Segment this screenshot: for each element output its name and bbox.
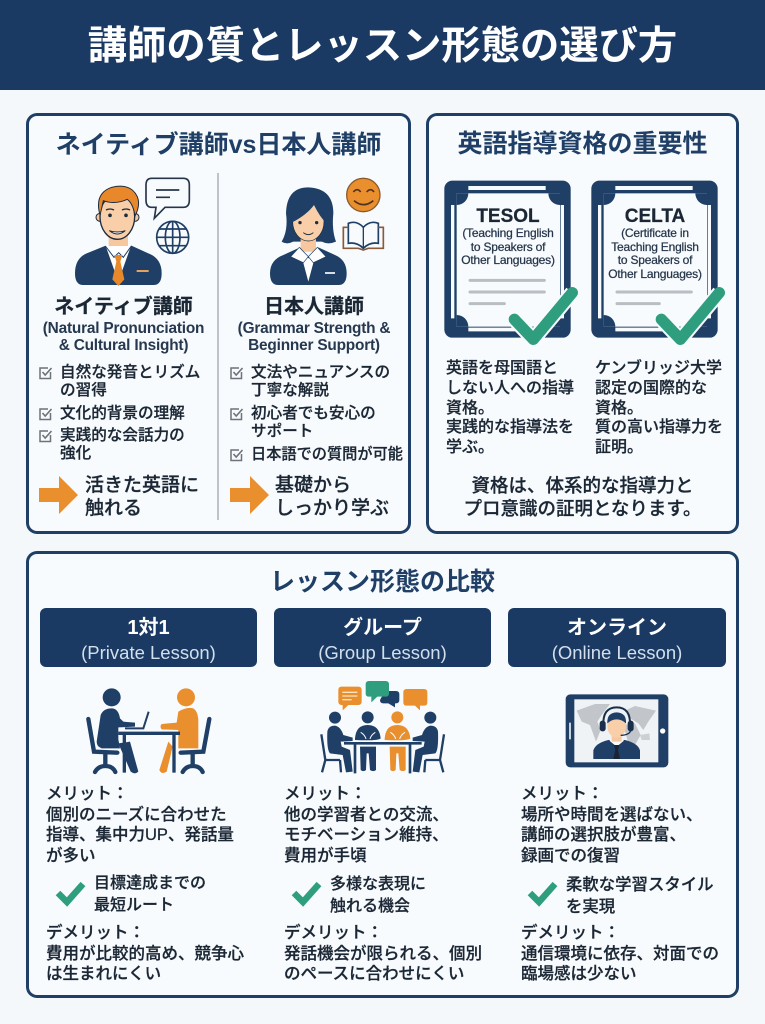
takeaway text: 活きた英語に [85,475,199,496]
certificate name: CELTA [625,206,685,227]
merit text: が多い [46,847,96,865]
panel heading: レッスン形態の比較 [270,568,495,596]
column: online lesson [508,608,726,988]
icon: Japanese teacher with smiley and book [270,178,384,285]
TESOL description: 学ぶ。 [446,439,494,456]
certificate name: TESOL [476,206,540,227]
takeaway text: 基礎から [275,475,351,496]
merit text [521,784,702,867]
merit text: 場所や時間を選ばない、 [521,806,702,824]
demerit text: 費用が比較的高め、競争心 [46,945,244,963]
certificate description: to Speakers of [471,240,545,254]
panel: English teaching qualifications [426,113,739,534]
divider [217,173,219,520]
list item: 実践的な会話力の [60,427,185,444]
panel heading: ネイティブ講師vs日本人講師 [56,131,381,159]
merit text: 個別のニーズに合わせた [46,806,227,824]
demerit text: は生まれにくい [46,965,161,983]
TESOL description [446,359,574,456]
demerit text: 臨場感は少ない [521,965,636,983]
benefit text: 最短ルート [94,897,174,914]
list item [251,404,376,440]
teacher name: 日本人講師 [264,296,364,318]
demerit text: デメリット： [521,924,620,942]
certificate description: Other Languages) [461,253,555,267]
teacher name: ネイティブ講師 [54,296,193,318]
takeaway text: しっかり学ぶ [275,498,389,519]
list item: 文化的背景の理解 [60,405,185,422]
list item: の習得 [60,382,107,399]
teacher subtitle: (Natural Pronunciation [43,320,204,337]
icon: check mark [527,880,558,906]
teacher subtitle [43,320,204,354]
benefit text: 多様な表現に [330,876,426,893]
column: native teacher [39,178,204,519]
qualification summary: プロ意識の証明となります。 [463,498,702,519]
certificate frame [591,180,725,345]
takeaway text [275,474,389,519]
icon: check mark [56,882,86,907]
list item: 日本語での質問が可能 [251,446,403,463]
icon: tablet with instructor and world map [510,680,740,780]
list item [251,364,390,399]
CELTA description: 認定の国際的な [595,380,707,397]
teacher subtitle [238,320,390,354]
list item: 文法やニュアンスの [251,364,390,381]
certificate description: Other Languages) [608,266,702,280]
demerit text: 通信環境に依存、対面での [521,945,719,963]
arrow [39,476,78,514]
takeaway text [85,474,199,519]
benefit text: 柔軟な学習スタイル [566,876,714,894]
demerit text [521,923,719,985]
CELTA description [595,358,723,456]
benefit text [330,875,426,915]
list item: 自然な発音とリズム [60,364,200,381]
benefit text: 目標達成までの [94,875,206,892]
title: 講師の質とレッスン形態の選び方 [88,24,677,68]
certificate description [608,226,702,281]
merit text [284,785,449,865]
icon: checkbox [39,367,52,380]
tab title: グループ [343,617,422,639]
TESOL description: 実践的な指導法を [446,419,574,436]
certificate: CELTA [591,180,725,345]
benefit text: を実現 [566,898,615,916]
TESOL description: 英語を母国語と [446,360,558,377]
benefit text [94,874,206,914]
merit text: 録画での復習 [521,847,620,865]
certificate description: Teaching English [611,240,699,254]
qualification summary [463,475,702,519]
tab subtitle: (Group Lesson) [318,642,447,663]
teacher subtitle: (Grammar Strength & [238,320,390,337]
certificate description: (Teaching English [462,226,554,240]
merit text: メリット： [284,785,366,803]
list item [60,364,200,399]
merit text [46,785,234,865]
demerit text: デメリット： [284,924,383,942]
demerit text [46,924,244,983]
icon: check mark [292,882,322,907]
list item: サポート [251,423,313,440]
CELTA description: ケンブリッジ大学 [595,360,722,377]
tab: private lesson [40,608,257,667]
CELTA description: 資格。 [595,400,643,417]
arrow [230,476,269,514]
list item: 強化 [60,445,91,462]
merit text: 他の学習者との交流、 [284,806,449,824]
list item: 丁寧な解説 [251,382,329,399]
TESOL description: しない人への指導 [446,380,574,397]
panel: lesson format comparison [26,551,739,998]
column: group lesson [274,608,491,983]
merit text: モチベーション維持、 [284,826,449,844]
list item: 初心者でも安心の [251,405,376,422]
benefit text: 触れる機会 [330,898,410,915]
CELTA description: 質の高い指導力を [595,419,723,436]
column: Japanese teacher [230,178,403,519]
certificate frame [444,180,578,345]
icon: native teacher with speech bubble and globe [75,178,190,286]
tab title: 1対1 [127,617,170,639]
certificate description [461,226,555,267]
certificate description: (Certificate in [621,226,689,240]
certificate: TESOL [444,180,578,345]
benefit text [566,874,714,918]
demerit text: 発話機会が限られる、個別 [284,945,482,963]
icon: checkbox [230,408,243,420]
panel heading: 英語指導資格の重要性 [457,130,708,158]
column: private lesson [40,608,257,983]
merit text: 指導、集中力UP、発話量 [46,826,234,844]
demerit text: のペースに合わせにくい [284,965,464,983]
panel: native vs Japanese teachers [26,113,411,534]
tab: group lesson [274,608,491,667]
merit text: メリット： [521,785,604,803]
icon: checkbox [39,430,52,442]
list item [60,426,185,462]
qualification summary: 資格は、体系的な指導力と [471,475,694,496]
tab title: オンライン [567,617,667,639]
header banner [0,0,765,90]
certificate description: to Speakers of [618,253,692,267]
tab subtitle: (Private Lesson) [81,642,216,663]
demerit text [284,923,482,985]
icon: checkbox [230,449,243,462]
demerit text: デメリット： [46,924,145,942]
icon: group at a table with speech bubbles [320,681,446,774]
icon: two people at a table [86,688,212,774]
merit text: 講師の選択肢が豊富、 [521,826,686,844]
teacher subtitle: Beginner Support) [248,337,380,354]
merit text: メリット： [46,785,128,803]
CELTA description: 証明。 [595,439,643,456]
takeaway text: 触れる [85,498,142,519]
icon: checkbox [230,367,243,380]
tab: online lesson [508,608,726,667]
icon: checkbox [39,408,52,420]
teacher subtitle: & Cultural Insight) [59,337,188,354]
tab subtitle: (Online Lesson) [552,642,682,663]
TESOL description: 資格。 [446,400,494,417]
merit text: 費用が手頃 [284,847,366,865]
